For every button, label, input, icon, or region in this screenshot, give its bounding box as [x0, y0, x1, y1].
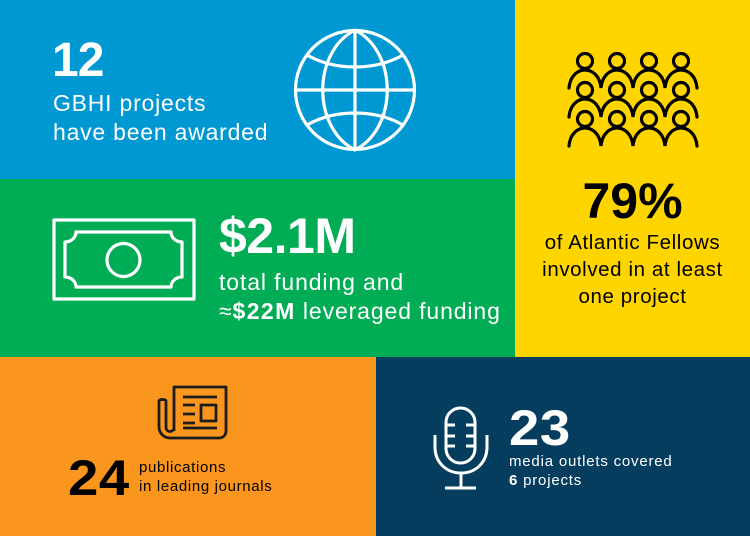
text: publications description	[139, 459, 272, 494]
text: funding description	[219, 269, 501, 324]
panel: publications	[0, 357, 376, 536]
text: funding description: total funding and	[219, 269, 404, 295]
text: media description: media outlets covered	[509, 453, 673, 470]
stat: 23 media outlets: 23	[509, 400, 571, 456]
text: media description: 6 projects	[509, 472, 582, 489]
text: fellows description: one project	[578, 285, 687, 308]
stat: funding amount: $2.1M	[219, 208, 355, 264]
text: media description	[509, 453, 673, 489]
panel: projects	[0, 0, 515, 179]
text: fellows description: of Atlantic Fellows	[545, 231, 720, 254]
text: projects awarded	[53, 90, 268, 145]
text: projects awarded: have been awarded	[53, 119, 268, 145]
stat: 24 publications: 24	[68, 450, 130, 506]
text: fellows description	[542, 231, 723, 308]
panel: fellows	[515, 0, 750, 357]
panel: funding	[0, 179, 515, 357]
text: funding description: ≈$22M leveraged funding	[219, 298, 501, 324]
stat: 12 projects: 12	[52, 34, 103, 87]
text: fellows description: involved in at least	[542, 258, 723, 281]
text: projects awarded: GBHI projects	[53, 90, 206, 116]
text: publications description: in leading journals	[139, 478, 272, 494]
panel: media	[376, 357, 750, 536]
text: publications description: publications	[139, 459, 226, 476]
stat: 79 percent: 79%	[582, 173, 683, 229]
